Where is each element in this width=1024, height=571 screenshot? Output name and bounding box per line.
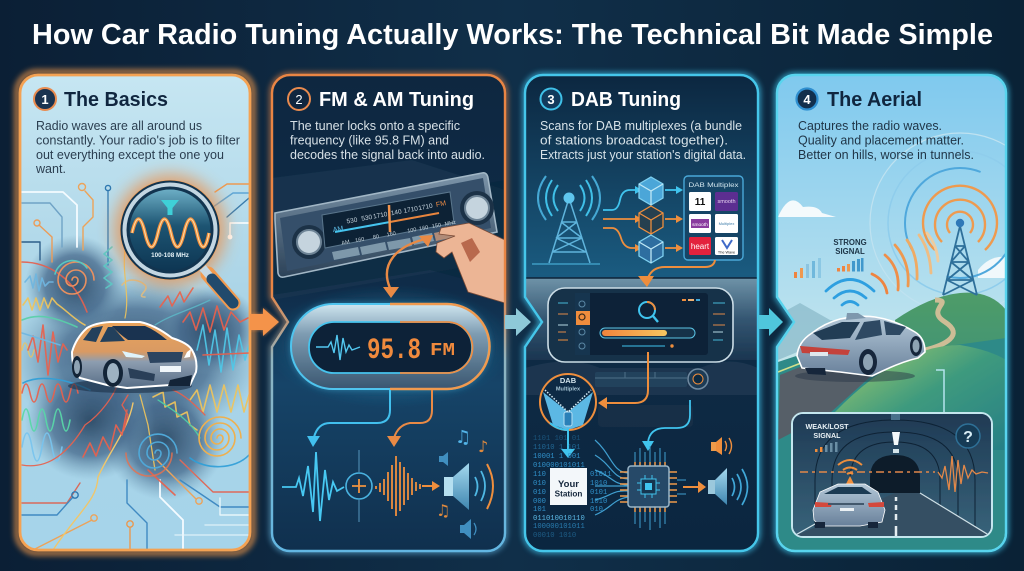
frequency display: FM [430, 341, 455, 361]
text block: the basics: constantly. Your radio's job is to filter [36, 134, 240, 148]
number badge 4 [796, 88, 818, 110]
pill glow [280, 291, 500, 400]
binary stream: 010000101011 [533, 462, 585, 470]
colored waves [22, 247, 249, 495]
text block: the basics [35, 119, 240, 176]
broken signal line [800, 471, 935, 473]
number badge 1: 1 [41, 92, 49, 107]
DAB multiplex zipper [540, 374, 596, 430]
binary stream: 011010010110 [533, 515, 585, 523]
magnifier: 100-108 MHz [151, 252, 189, 259]
DAB multiplex box: 11 [695, 197, 706, 208]
dark blobs [22, 238, 248, 496]
tuning arrow [386, 239, 423, 287]
inset: tunnel [792, 413, 992, 537]
connectors [605, 260, 715, 442]
DAB multiplex box: DAB Multiplex [688, 182, 739, 189]
binary stream: 100000101011 [533, 523, 585, 531]
connectors to waves [314, 390, 432, 438]
text block: DAB tuning: Scans for DAB multiplexes (a bundle [540, 118, 742, 133]
text block: the basics: out everything except the one you [36, 148, 224, 162]
car radio unit: MHz [444, 220, 457, 228]
text block: FM and AM tuning: decodes the signal back into audio. [290, 148, 485, 162]
binary stream: 010 [533, 489, 546, 497]
broadcast tower [532, 176, 600, 264]
car radio unit: AM [332, 225, 344, 234]
question mark icon [956, 424, 980, 448]
DAB multiplex box: The Wave [718, 250, 735, 254]
car radio unit: AM [341, 239, 351, 247]
text block: the aerial: Captures the radio waves. [798, 119, 942, 133]
car radio unit: 160 [386, 231, 396, 238]
binary stream: 11010 1 101 [533, 444, 580, 452]
DAB multiplex box: smooth [692, 222, 708, 228]
arrow: basics to FM and AM [250, 308, 279, 336]
dashboard [525, 278, 758, 427]
magnifier [114, 174, 233, 303]
transmission tower [943, 219, 977, 295]
car radio unit: 530 [361, 214, 373, 223]
hand [436, 223, 505, 303]
tuning dial [322, 192, 454, 248]
icon: speaker small [711, 437, 732, 455]
DAB multiplex box: Multiplex [719, 221, 734, 226]
binary stream: 000 [533, 498, 546, 506]
binary stream: 1101 101 01 [533, 435, 580, 443]
text block: FM and AM tuning: The tuner locks onto a specific [290, 119, 460, 133]
weak signal label: WEAK/LOST [805, 422, 849, 431]
your station card: Your [558, 479, 579, 490]
small speakers [439, 452, 448, 466]
text block: DAB tuning: of stations broadcast together). [540, 132, 728, 148]
DAB multiplex zipper: Multiplex [556, 386, 581, 392]
heading: the basics: The Basics [64, 88, 168, 111]
dashboard shadow [272, 160, 505, 300]
binary stream: 1010 [590, 480, 607, 488]
binary stream: 010 [590, 506, 603, 514]
preset buttons [332, 247, 360, 260]
text block: the aerial: Better on hills, worse in tunnels. [798, 148, 974, 162]
car radio unit: 150 [431, 222, 442, 230]
chip [620, 446, 677, 530]
weak signal bars [815, 442, 838, 452]
car radio unit: 530 [346, 217, 358, 226]
signal: carrier and audio wave [282, 450, 434, 522]
infotainment screen [548, 288, 733, 362]
car radio unit: 160 [419, 225, 429, 232]
frequency display [290, 303, 490, 390]
DAB multiplex zipper: DAB [560, 376, 577, 385]
binary stream: 110 [533, 471, 546, 479]
text block: FM and AM tuning: frequency (like 95.8 FM) and [290, 134, 449, 148]
binary stream: 01011 [590, 471, 612, 479]
strong signal bars [794, 258, 864, 278]
binary stream: 101 [533, 506, 546, 514]
DAB multiplex box: heart [691, 242, 710, 251]
signal arcs to car [872, 233, 938, 293]
clouds [778, 200, 836, 217]
DAB multiplex box: smooth [717, 199, 736, 205]
car radio unit [275, 173, 497, 277]
car radio unit: 160 [355, 237, 365, 244]
text block: DAB tuning: Extracts just your station's digital data. [540, 147, 746, 162]
illustration: noisy radio waves [10, 184, 260, 551]
arrow: DAB to aerial [758, 308, 783, 336]
number badge 3 [540, 88, 562, 110]
frequency display: 95.8 [367, 334, 421, 368]
text block: the basics: Radio waves are all around us [36, 119, 202, 133]
right knob [460, 191, 494, 225]
car: sedan with aerial [795, 313, 925, 382]
number badge 2 [288, 88, 310, 110]
weak signal label [805, 422, 849, 440]
car radio unit: 100 [407, 227, 417, 235]
hills and road [895, 293, 1006, 450]
car in tunnel [813, 484, 885, 528]
binary stream [533, 435, 612, 540]
music notes: ♪ [478, 437, 488, 456]
number badge 3: 3 [547, 92, 555, 107]
car radio unit: 140 [390, 208, 403, 217]
spiral signals [55, 261, 241, 476]
car: hatchback [68, 322, 196, 393]
binary stream: 010 [533, 480, 546, 488]
binary stream: 1010 [590, 498, 607, 506]
DAB multiplex box [684, 176, 743, 260]
panel: DAB tuning [525, 75, 758, 551]
text block: the aerial: Quality and placement matter. [798, 134, 964, 148]
panel: the aerial [777, 75, 1024, 551]
weak signal label: SIGNAL [813, 431, 841, 440]
text block: the basics: want. [35, 162, 66, 176]
text block: FM and AM tuning [290, 119, 485, 162]
car radio unit: 1710 [403, 205, 419, 215]
signal rings [870, 132, 1005, 304]
wifi arcs [826, 280, 874, 305]
weak wifi arcs [838, 460, 862, 474]
icon: funnel [161, 200, 179, 215]
car radio unit: 80 [372, 234, 380, 241]
icon: speaker large [708, 468, 748, 505]
number badge 2: 2 [295, 92, 303, 107]
heading: FM and AM tuning: FM & AM Tuning [319, 88, 474, 111]
your station card: Station [555, 490, 582, 498]
question mark icon: ? [963, 429, 973, 446]
streams to chip [595, 440, 628, 515]
text block: DAB tuning [540, 118, 746, 162]
panel: FM and AM tuning [265, 75, 515, 551]
strong signal label: SIGNAL [835, 247, 865, 256]
car radio unit: 1710 [373, 211, 388, 221]
music notes [438, 430, 487, 518]
data cubes [639, 177, 663, 263]
heading: the aerial: The Aerial [827, 88, 922, 111]
multiplex flow lines [603, 190, 677, 248]
title: How Car Radio Tuning Actually Works: The Technical Bit Made Simple [32, 19, 993, 51]
tunnel connector [936, 370, 944, 414]
number badge 1 [34, 88, 56, 110]
music notes: ♫ [455, 427, 471, 448]
strong signal label [833, 238, 867, 256]
number badge 4: 4 [803, 92, 811, 107]
icon: speaker [444, 463, 493, 510]
heading: DAB tuning: DAB Tuning [571, 88, 681, 111]
car radio unit: FM [436, 200, 447, 209]
music notes: ♫ [436, 501, 450, 520]
circuit traces [22, 184, 249, 551]
binary stream: 00010 1010 [533, 532, 576, 540]
text block: the aerial [798, 119, 974, 162]
strong signal label: STRONG [833, 238, 867, 247]
binary stream: 10001 1 001 [533, 453, 580, 461]
car radio unit: 1710 [418, 203, 434, 212]
arrow: FM and AM to DAB [505, 308, 531, 336]
left knob [292, 225, 326, 259]
noisy signal [938, 456, 988, 492]
binary stream: 0101 [590, 489, 607, 497]
your station card [550, 468, 587, 505]
panel: the basics [10, 72, 260, 553]
